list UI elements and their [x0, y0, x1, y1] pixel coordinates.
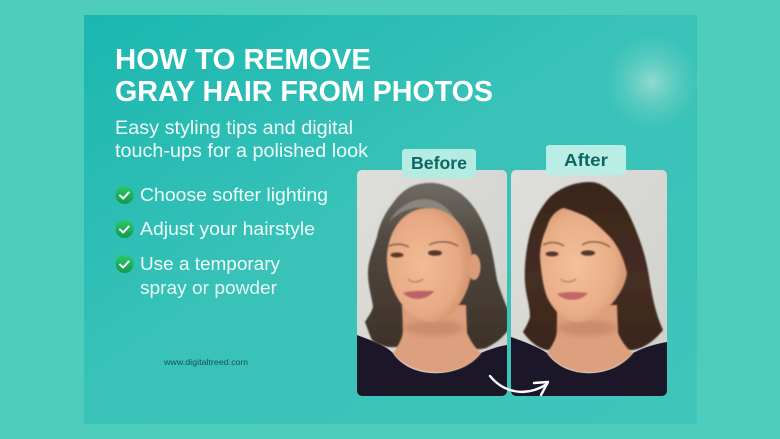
neck shadow: [404, 320, 464, 336]
hair: [523, 182, 663, 350]
face: [387, 208, 472, 322]
item: hairstyle: Adjust your hairstyle: [140, 218, 315, 239]
neck: [393, 305, 481, 372]
title: GRAY HAIR FROM PHOTOS: [115, 76, 493, 108]
item: temporary spray: spray or powder: [140, 277, 277, 298]
panel: main teal card: [84, 15, 700, 424]
subtitle: Easy styling tips and digital: [115, 118, 353, 139]
subtitle: [115, 118, 369, 162]
title: [115, 44, 493, 108]
item: temporary spray: [116, 253, 281, 298]
label: after: [546, 145, 626, 175]
shirt: [511, 337, 667, 396]
label: after: After: [564, 150, 608, 170]
neck shadow: [557, 320, 617, 336]
item: temporary spray: Use a temporary: [140, 253, 281, 274]
photo: before: [357, 170, 508, 396]
item: softer lighting: Choose softer lighting: [140, 184, 328, 205]
title: HOW TO REMOVE: [115, 44, 371, 76]
face: [540, 208, 627, 322]
photo: after: [511, 170, 667, 396]
label: before: Before: [411, 153, 467, 173]
brows eyes nose mouth: [389, 242, 458, 247]
brows eyes nose mouth: [543, 242, 610, 247]
gray streak: [390, 198, 456, 221]
arrow: [490, 376, 548, 395]
ear: [468, 254, 480, 280]
neck: [547, 305, 633, 372]
label: before: [402, 149, 476, 178]
subtitle: touch-ups for a polished look: [115, 141, 369, 162]
hair: [365, 183, 508, 349]
checklist: [116, 184, 328, 298]
shirt: [357, 335, 507, 396]
website url: www.digitaltreed.com: [163, 358, 248, 367]
